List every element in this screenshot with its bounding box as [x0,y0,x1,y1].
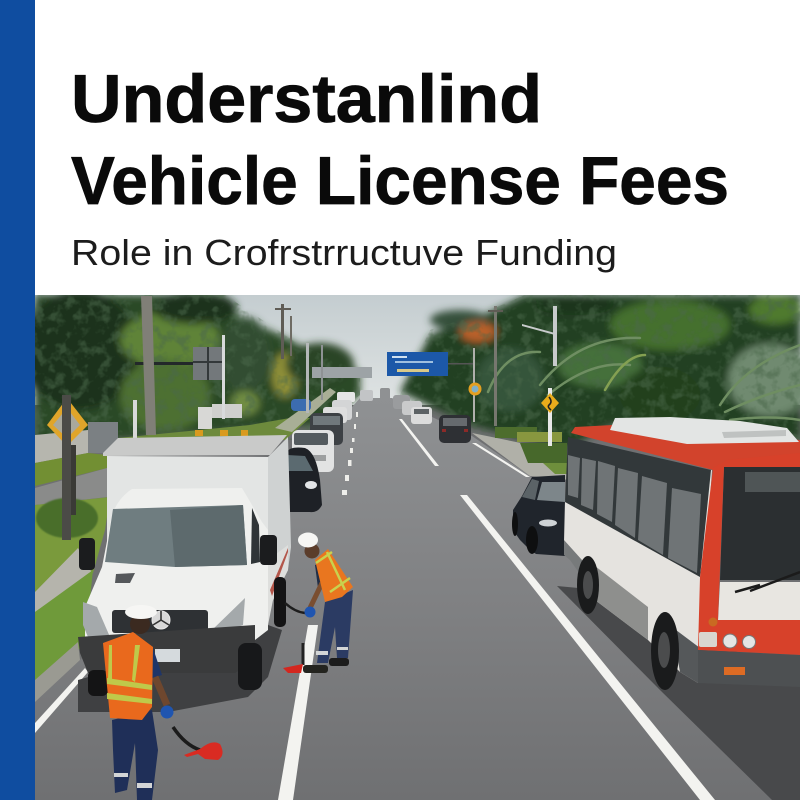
cargo box [103,435,287,456]
left lawn [35,453,107,486]
side windows [568,455,701,573]
bumper [698,650,800,687]
dark car left lane [310,413,343,445]
right verge [472,427,570,480]
wheels [651,612,679,690]
sidewalk [35,548,92,612]
worker: right [283,532,353,673]
red scoop [283,664,303,673]
photo base [35,295,800,800]
white car left lane [292,430,334,472]
windshield [105,505,247,567]
title: Vehicle License Fees [71,143,729,219]
lower grey stripe middle [595,566,648,640]
sleeve [143,648,162,680]
destination sign [745,472,800,492]
white truck [78,435,291,696]
kerb [35,642,80,702]
truck ground shadow [78,625,282,712]
windshield [720,465,800,580]
dark SUV [439,415,471,443]
road signs [47,382,559,540]
headlights [699,618,756,648]
side window [251,508,260,564]
bumper [78,625,255,673]
worker: front left [103,605,223,800]
shadow under bus [557,586,800,800]
tool [302,643,304,665]
title panel [35,0,800,295]
head [304,544,320,558]
trees: left side [20,290,360,445]
palm fronds [488,338,800,420]
title [71,61,729,219]
trees: right side [400,295,800,450]
front white panel [718,582,800,620]
head [130,614,150,634]
helmet [298,532,318,548]
side body lower [268,545,288,625]
hedge [36,498,98,538]
centre dashes [342,412,358,495]
arm [155,677,167,705]
dark car beside bus [512,475,565,556]
legs [317,590,353,663]
gantry [306,343,372,413]
glove [304,606,316,618]
left roadside wall and fence [35,388,336,463]
grey sign left [133,335,225,440]
lower lawn [35,497,110,617]
wheels [88,670,108,696]
sky [35,295,800,405]
vest [103,632,153,720]
arm [310,583,322,608]
shirt [315,560,332,590]
red front column [698,453,800,655]
bus [564,417,800,690]
cab [85,488,268,640]
wipers [735,572,800,592]
red scoop [184,742,223,760]
white car far right lane [411,407,432,424]
helmet [125,605,157,619]
boots [303,665,328,673]
photo: road scene [20,290,800,800]
blue highway sign [387,352,473,376]
left side road [35,468,108,505]
grille [112,610,208,633]
tool handle [173,727,200,750]
grass strip [35,570,93,680]
white body [564,470,712,683]
mirrors [79,538,95,570]
lane lines [35,419,715,800]
lower grey stripe rear [564,540,582,577]
plate [155,649,180,662]
glove [160,706,174,718]
vest [315,549,353,602]
foliage texture [35,295,800,455]
utility poles [141,296,557,446]
subtitle: Role in Crofrstrructuve Funding [71,232,617,273]
hose [285,603,305,613]
side window band [565,437,711,577]
headlights [83,602,110,637]
road surface [35,398,800,800]
roof unit [610,417,799,444]
title: Understanlind [71,61,542,137]
distant traffic [287,388,471,512]
red roof [571,425,800,470]
hood vent [115,573,135,583]
lower grey stripe front [672,627,700,683]
black car left lane [287,448,322,512]
accent bar: blue [0,0,35,800]
legs [112,710,158,800]
